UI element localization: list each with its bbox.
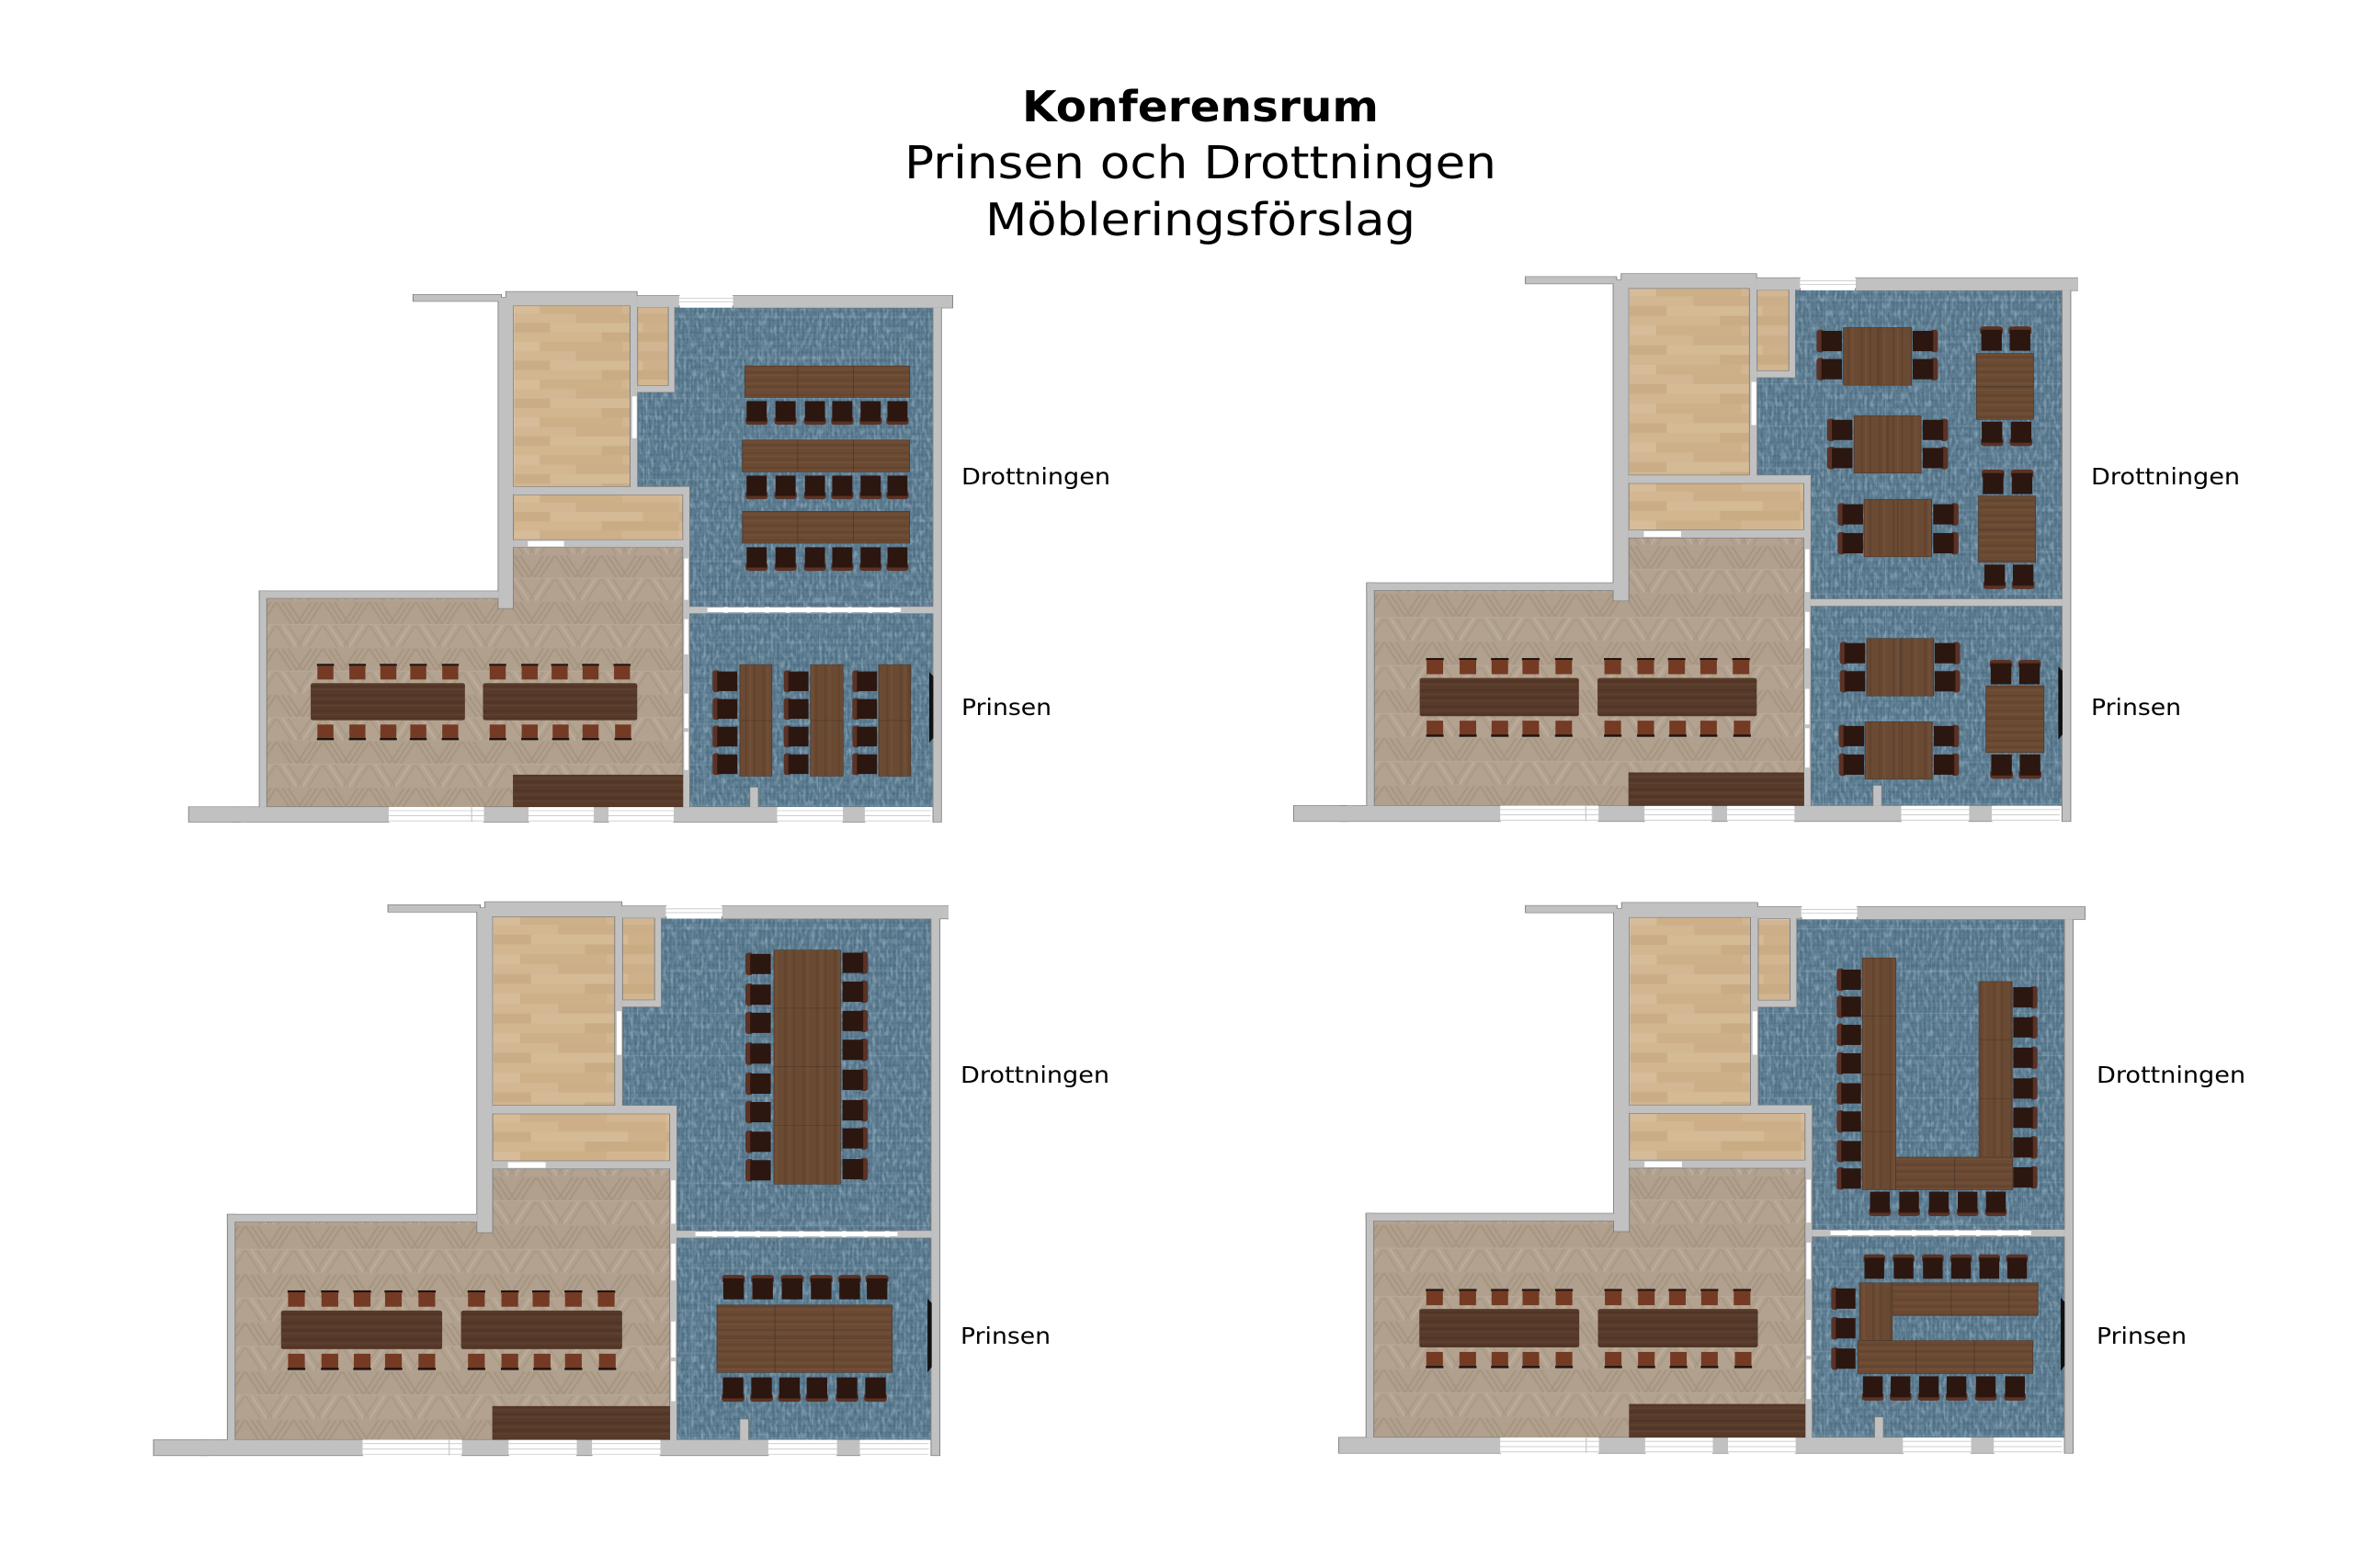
label: Prinsen: Prinsen — [2097, 1323, 2187, 1349]
tables — [1844, 327, 1934, 779]
plan shell: walls and floors — [189, 291, 952, 822]
furniture: tables and chairs — [712, 366, 933, 776]
panel: plan bottom right, U-shape layout — [1339, 903, 2245, 1453]
plan shell: walls and floors — [1339, 903, 2085, 1453]
label: Drottningen: Drottningen — [2097, 1062, 2245, 1088]
Drottningen U-shaped tables — [1862, 958, 2013, 1190]
screen — [2058, 666, 2063, 740]
Prinsen chairs — [1831, 1255, 2028, 1401]
title — [904, 82, 1496, 246]
subheading: room names: Prinsen och Drottningen — [904, 137, 1496, 189]
Prinsen columns of tables — [740, 665, 911, 776]
screen — [927, 1299, 932, 1372]
chairs — [1816, 326, 2041, 778]
label: Drottningen: Drottningen — [961, 1062, 1109, 1088]
end tables — [1976, 353, 2044, 753]
Prinsen chairs — [722, 1275, 889, 1402]
Drottningen rows of tables — [743, 366, 910, 543]
furniture: tables and chairs — [1816, 326, 2063, 779]
plan shell: walls and floors — [153, 902, 951, 1455]
Prinsen table — [717, 1305, 892, 1372]
Prinsen chairs — [712, 670, 877, 775]
label: Prinsen: Prinsen — [961, 694, 1051, 721]
label: Drottningen: Drottningen — [961, 463, 1110, 490]
heading: Konferensrum: Konferensrum — [1022, 82, 1379, 131]
subheading: furnishing proposals: Möbleringsförslag — [985, 194, 1415, 246]
plan shell: walls and floors — [1294, 274, 2082, 822]
wall end trim — [2078, 274, 2085, 292]
wall end trim — [949, 904, 955, 923]
panel: plan top left, classroom layout — [189, 291, 1110, 822]
panel: plan top right, group layout — [1294, 274, 2240, 822]
panel: plan bottom left, boardroom layout — [153, 902, 1109, 1455]
Drottningen chairs — [1836, 969, 2038, 1216]
Drottningen chairs — [745, 401, 908, 571]
label: Prinsen: Prinsen — [2091, 694, 2181, 721]
screen — [2061, 1298, 2064, 1371]
label: Drottningen: Drottningen — [2091, 463, 2240, 490]
Drottningen long table — [774, 950, 840, 1184]
furniture: tables and chairs — [1831, 958, 2064, 1401]
label: Prinsen: Prinsen — [961, 1323, 1051, 1349]
furniture: tables and chairs — [717, 950, 932, 1402]
Prinsen C-shaped tables — [1858, 1283, 2038, 1374]
screen — [929, 672, 933, 743]
Drottningen chairs — [745, 951, 868, 1182]
